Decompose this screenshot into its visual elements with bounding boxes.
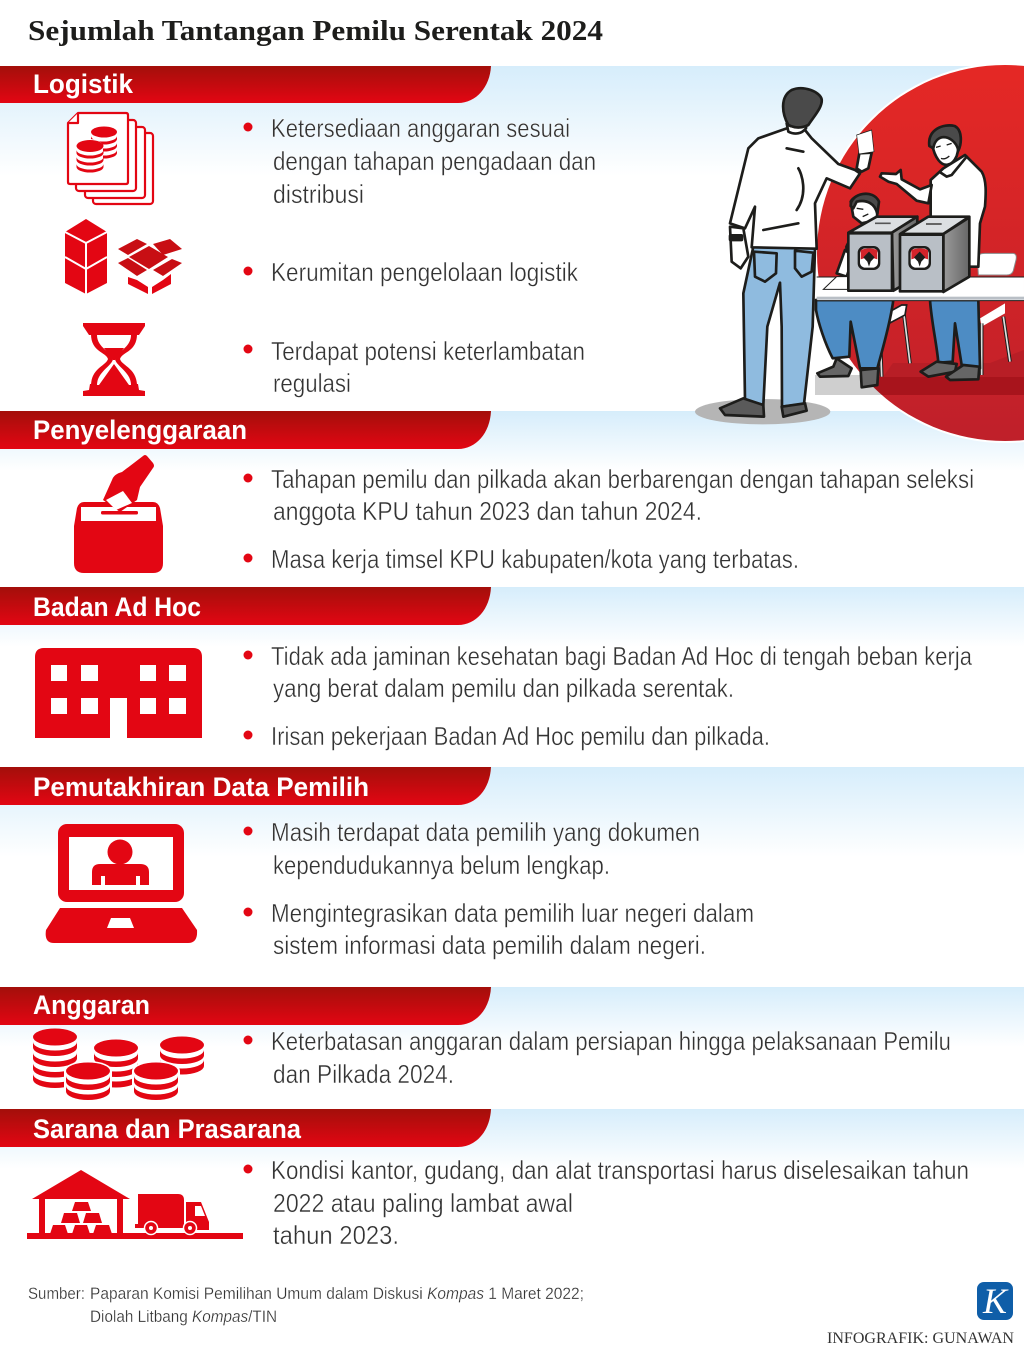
standing voter bbox=[720, 88, 874, 417]
logo: Kompas K bbox=[977, 1281, 1013, 1321]
source note: Paparan Komisi Pemilihan Umum dalam Diskusi Kompas 1 Maret 2022; bbox=[90, 1284, 584, 1303]
section bar: Pemutakhiran Data Pemilih: Pemutakhiran Data Pemilih bbox=[33, 772, 369, 802]
section bar: Badan Ad Hoc bbox=[0, 587, 491, 625]
ballot box 1 bbox=[848, 217, 917, 291]
text: Pemutakhiran points: Mengintegrasikan data pemilih luar negeri dalam bbox=[271, 898, 754, 928]
text: Penyelenggaraan points bbox=[244, 464, 974, 574]
icon: hourglass bbox=[83, 323, 145, 396]
section bar: Anggaran: Anggaran bbox=[33, 990, 150, 1020]
section bar: Penyelenggaraan: Penyelenggaraan bbox=[33, 415, 247, 445]
section bar: Sarana dan Prasarana bbox=[0, 1109, 491, 1147]
icon: laptop with user bbox=[46, 824, 197, 943]
text: Pemutakhiran points: sistem informasi data pemilih dalam negeri. bbox=[273, 930, 706, 960]
section bar: Badan Ad Hoc: Badan Ad Hoc bbox=[33, 592, 201, 622]
panel: Sarana dan Prasarana bbox=[0, 1109, 969, 1250]
text: Logistik points: Kerumitan pengelolaan logistik bbox=[271, 257, 579, 287]
text: Pemutakhiran points: Masih terdapat data pemilih yang dokumen bbox=[271, 817, 700, 847]
text: Logistik points: regulasi bbox=[273, 368, 351, 398]
panel: Logistik bbox=[0, 66, 596, 398]
table bbox=[817, 277, 1024, 301]
text: Sarana dan Prasarana points: tahun 2023. bbox=[273, 1220, 399, 1250]
icon: documents with coins bbox=[68, 113, 153, 204]
text: Logistik points: distribusi bbox=[273, 179, 364, 209]
illustration: voters at polling station bbox=[695, 63, 1024, 443]
source note: Sumber: bbox=[28, 1284, 85, 1303]
text: Sarana dan Prasarana points: 2022 atau paling lambat awal bbox=[273, 1188, 573, 1218]
icon: boxes bbox=[65, 219, 182, 294]
text: Anggaran points bbox=[244, 1026, 951, 1089]
icon: coin stacks bbox=[33, 1028, 204, 1102]
text: Sarana dan Prasarana points bbox=[244, 1155, 969, 1250]
text: Pemutakhiran points: kependudukannya belum lengkap. bbox=[273, 850, 610, 880]
icon: warehouse and truck bbox=[27, 1170, 243, 1239]
seated man bbox=[816, 194, 893, 387]
text: Penyelenggaraan points: Masa kerja timsel KPU kabupaten/kota yang terbatas. bbox=[271, 544, 799, 574]
title: Sejumlah Tantangan Pemilu Serentak 2024 bbox=[28, 16, 603, 47]
ballot box 2 bbox=[875, 217, 969, 292]
text: Anggaran points: dan Pilkada 2024. bbox=[273, 1059, 454, 1089]
section bar: Sarana dan Prasarana: Sarana dan Prasarana bbox=[33, 1114, 302, 1144]
text: Logistik points: Ketersediaan anggaran sesuai bbox=[271, 113, 570, 143]
source note bbox=[28, 1284, 584, 1326]
icon: ballot box with hand bbox=[74, 455, 163, 573]
text: Badan Ad Hoc points: Irisan pekerjaan Badan Ad Hoc pemilu dan pilkada. bbox=[271, 721, 770, 751]
section bar: Logistik: Logistik bbox=[33, 69, 134, 99]
panel: Badan Ad Hoc bbox=[0, 587, 972, 751]
text: Logistik points bbox=[244, 113, 596, 398]
panel: Anggaran bbox=[0, 987, 951, 1102]
credit: INFOGRAFIK: GUNAWAN bbox=[827, 1330, 1014, 1347]
text: Penyelenggaraan points: anggota KPU tahun 2023 dan tahun 2024. bbox=[273, 496, 702, 526]
text: Logistik points: Terdapat potensi keterlambatan bbox=[271, 336, 585, 366]
text: Badan Ad Hoc points: yang berat dalam pemilu dan pilkada serentak. bbox=[273, 673, 734, 703]
logo: Kompas K: K bbox=[982, 1281, 1009, 1321]
section bar: Logistik bbox=[0, 66, 491, 103]
standing official bbox=[880, 125, 986, 380]
panel: Penyelenggaraan bbox=[0, 411, 974, 574]
section bar: Pemutakhiran Data Pemilih bbox=[0, 767, 491, 805]
panel: Pemutakhiran Data Pemilih bbox=[0, 767, 754, 960]
section bar: Penyelenggaraan bbox=[0, 411, 491, 449]
icon: building bbox=[35, 648, 202, 738]
section bar: Anggaran bbox=[0, 987, 491, 1025]
text: Pemutakhiran points bbox=[244, 817, 754, 960]
text: Badan Ad Hoc points bbox=[244, 641, 972, 751]
source note: Diolah Litbang Kompas/TIN bbox=[90, 1307, 277, 1326]
text: Logistik points: dengan tahapan pengadaan dan bbox=[273, 146, 596, 176]
